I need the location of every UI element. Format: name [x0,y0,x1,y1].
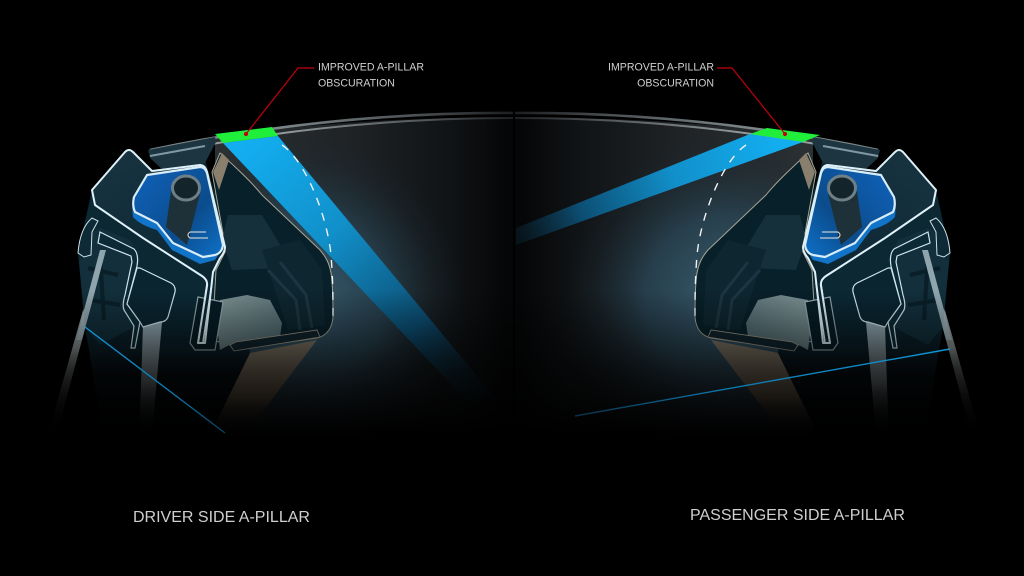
bottom fade [0,290,1024,460]
driver side green obscuration band [215,127,278,143]
passenger side callout text: OBSCURATION [637,78,714,90]
top rail [148,137,216,170]
left glass bar [45,250,106,445]
driver side label: DRIVER SIDE A-PILLAR [133,509,310,526]
interior shaded panels [222,215,325,330]
passenger side interior panel [515,118,813,445]
center seam [513,105,515,445]
passenger side callout text: IMPROVED A-PILLAR [608,62,714,74]
tube [166,176,200,245]
large hollow section [92,150,225,343]
seal lattice [88,255,120,320]
passenger side blue sight line [575,349,950,416]
rail strips [150,146,205,156]
trim lip [230,330,320,351]
lower pillar body [78,150,250,445]
passenger side callout leader [717,68,786,136]
driver side interior panel [215,118,513,445]
passenger side sight beam [516,134,803,245]
rubber seal [78,218,98,257]
driver side callout leader [244,68,314,136]
passenger side label: PASSENGER SIDE A-PILLAR [690,507,905,524]
interior trim [212,153,333,350]
seal body [79,228,140,345]
tan upper trim [213,153,229,190]
passenger side green obscuration band [750,128,820,142]
driver side blue sight line [85,327,225,433]
driver side callout text: OBSCURATION [318,78,395,90]
driver side pillar cross-section [45,137,333,445]
frame bracket [190,297,223,350]
driver side callout text: IMPROVED A-PILLAR [318,62,424,74]
inner steel strip [198,283,212,344]
blue lower rim [132,205,223,264]
glass bar top [76,250,106,340]
mid hollow cavity [127,268,175,327]
driver side windshield glass arc [150,113,513,155]
mid hollow section [98,232,140,348]
driver side sight beam [223,136,497,400]
passenger side windshield glass arc [515,113,878,155]
blue reinforcement [133,167,223,257]
center bar [139,322,162,445]
clip [188,232,208,238]
passenger side pillar cross-section (mirrored) [695,137,983,445]
tan lower trim [203,340,317,445]
cushion [217,295,282,350]
dashed obscuration line [282,145,333,316]
